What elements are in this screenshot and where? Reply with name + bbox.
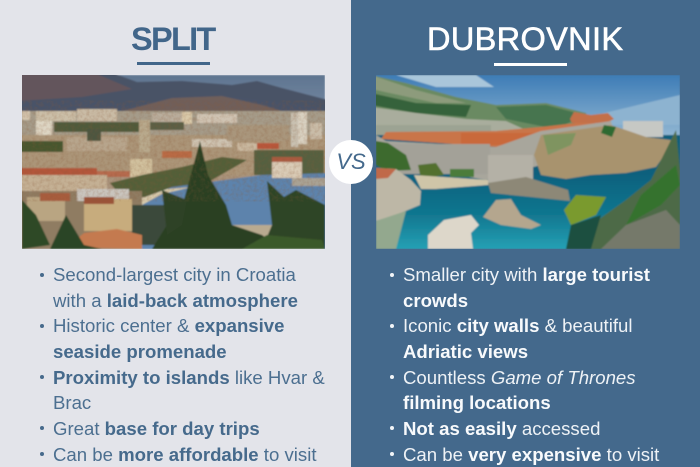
bullet: Dubrovnik 4 [390, 426, 394, 430]
bullet: Split 5 [40, 452, 44, 456]
badge: VS: VS [336, 149, 366, 174]
panel: Dubrovnik background [351, 0, 700, 467]
heading underline: Split [137, 62, 210, 64]
badge: VS [329, 140, 373, 184]
text: Split 2 line 2: seaside promenade [53, 341, 227, 362]
text: Split 3 line 2: Brac [53, 392, 91, 413]
trees [152, 141, 282, 249]
text: Dubrovnik 3 line 2: filming locations [403, 392, 551, 413]
bullet: Dubrovnik 5 [390, 452, 394, 456]
text: Split 3 line 1: Proximity to islands like Hvar & [53, 367, 325, 388]
text: Split 1 line 1: Second-largest city in Croatia [53, 264, 296, 285]
bullet: Dubrovnik 1 [390, 273, 394, 277]
text: Dubrovnik 5: Can be very expensive to visit [403, 444, 659, 465]
bullet: Split 3 [40, 375, 44, 379]
foreground buildings [17, 191, 142, 249]
list: Split highlights [40, 264, 325, 465]
photo: Split harbor view [22, 75, 325, 249]
text: Split 4: Great base for day trips [53, 418, 260, 439]
city texture [22, 109, 325, 193]
text: Dubrovnik 3 line 1: Countless Game of Thrones [403, 367, 636, 388]
heading: Dubrovnik: DUBROVNIK [427, 21, 623, 57]
bullet: Split 2 [40, 324, 44, 328]
text: Split 1 line 2: with a laid-back atmosphere [53, 290, 298, 311]
text: Split 5: Can be more affordable to visit [53, 444, 317, 465]
text: Dubrovnik 2 line 2: Adriatic views [403, 341, 528, 362]
text: Split 2 line 1: Historic center & expansive [53, 315, 284, 336]
list: Dubrovnik highlights [390, 264, 660, 465]
text: Dubrovnik 1 line 2: crowds [403, 290, 468, 311]
city rows [17, 111, 327, 137]
bullet: Dubrovnik 2 [390, 324, 394, 328]
bullet: Split 4 [40, 426, 44, 430]
heading: Split: SPLIT [131, 21, 215, 57]
bullet: Dubrovnik 3 [390, 375, 394, 379]
text: Dubrovnik 1 line 1: Smaller city with large tourist [403, 264, 650, 285]
panel: Split background [0, 0, 351, 467]
text: Dubrovnik 4: Not as easily accessed [403, 418, 600, 439]
text: Dubrovnik 2 line 1: Iconic city walls & beautiful [403, 315, 632, 336]
bullet: Split 1 [40, 273, 44, 277]
photo: Dubrovnik old town and bay [376, 75, 680, 249]
heading underline: Dubrovnik [494, 63, 567, 66]
